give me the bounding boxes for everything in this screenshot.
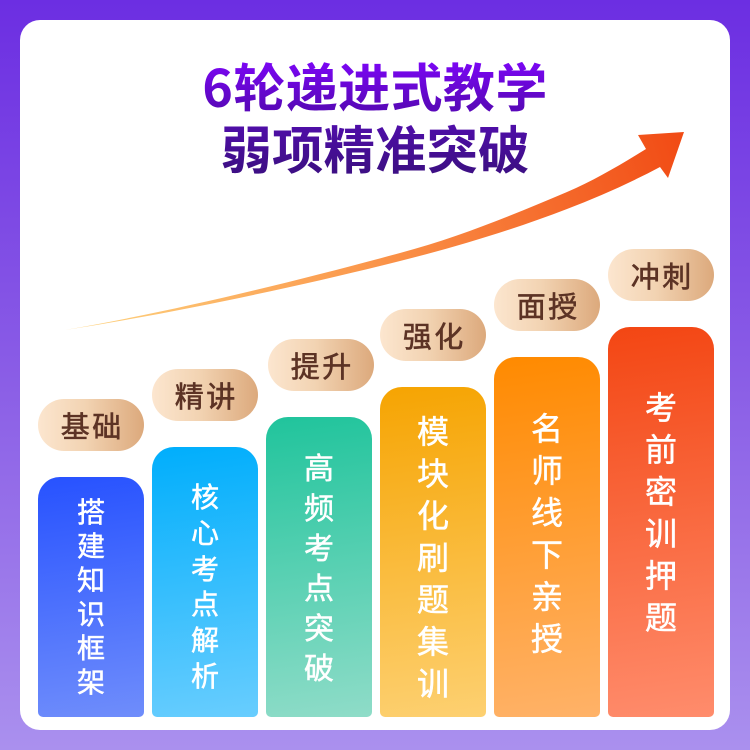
bar text: 突 <box>304 613 334 646</box>
bar text: 题 <box>417 582 449 618</box>
bar text: 线 <box>531 495 563 531</box>
bar: 模块化刷题集训 <box>380 387 486 717</box>
bar text: 建 <box>77 531 105 562</box>
bar text: 集 <box>417 624 449 660</box>
bar text: 前 <box>645 432 677 468</box>
bar text: 搭 <box>77 497 105 528</box>
bar text: 考 <box>304 533 334 566</box>
bar text: 点 <box>304 573 334 606</box>
bar text: 师 <box>531 453 563 489</box>
bar: 考前密训押题 <box>608 327 714 717</box>
pill: 面授 <box>494 279 600 331</box>
bar: 高频考点突破 <box>266 417 372 717</box>
bar text: 密 <box>645 474 677 510</box>
bar text: 训 <box>417 666 449 702</box>
pill: 基础 <box>38 399 144 451</box>
pill: 强化 <box>380 309 486 361</box>
bar text: 析 <box>191 661 219 692</box>
bar text <box>531 411 563 657</box>
bar: 核心考点解析 <box>152 447 258 717</box>
pill: 精讲: 精讲 <box>175 382 238 414</box>
bar text: 考 <box>645 390 677 426</box>
bar text: 考 <box>191 554 219 585</box>
title line 1 <box>0 54 750 116</box>
bar text: 点 <box>191 589 219 620</box>
bar text: 块 <box>417 456 449 492</box>
bar text: 刷 <box>417 540 449 576</box>
bar text: 架 <box>77 667 105 698</box>
bar text <box>417 414 449 702</box>
title line 1: 6轮递进式教学 <box>202 47 548 122</box>
bar text: 授 <box>531 621 563 657</box>
bar text: 高 <box>304 453 334 486</box>
pill: 精讲 <box>152 369 258 421</box>
bar text: 知 <box>77 565 105 596</box>
title line 2 <box>0 116 750 178</box>
bar text: 模 <box>417 414 449 450</box>
bar text <box>191 482 219 692</box>
bar text: 破 <box>304 653 334 686</box>
pill: 面授: 面授 <box>517 292 580 324</box>
bar text: 训 <box>645 516 677 552</box>
pill: 提升 <box>268 339 374 391</box>
bar text: 化 <box>417 498 449 534</box>
title line 2: 弱项精准突破 <box>220 109 530 184</box>
pill: 基础: 基础 <box>61 412 124 444</box>
bar text: 名 <box>531 411 563 447</box>
bar text: 下 <box>531 537 563 573</box>
bar text: 题 <box>645 600 677 636</box>
bar text: 频 <box>304 493 334 526</box>
bar text <box>645 390 677 636</box>
bar text: 框 <box>77 633 105 664</box>
bar text: 押 <box>645 558 677 594</box>
pill: 提升: 提升 <box>291 352 354 384</box>
pill: 冲刺: 冲刺 <box>631 262 694 294</box>
bar text: 核 <box>191 482 219 513</box>
pill: 强化: 强化 <box>403 322 466 354</box>
bar text: 亲 <box>531 579 563 615</box>
bar text: 心 <box>191 518 219 549</box>
bar text <box>304 453 334 686</box>
bar text: 解 <box>191 625 219 656</box>
bar: 名师线下亲授 <box>494 357 600 717</box>
pill: 冲刺 <box>608 249 714 301</box>
bar text <box>77 497 105 698</box>
bar: 搭建知识框架 <box>38 477 144 717</box>
bar text: 识 <box>77 599 105 630</box>
